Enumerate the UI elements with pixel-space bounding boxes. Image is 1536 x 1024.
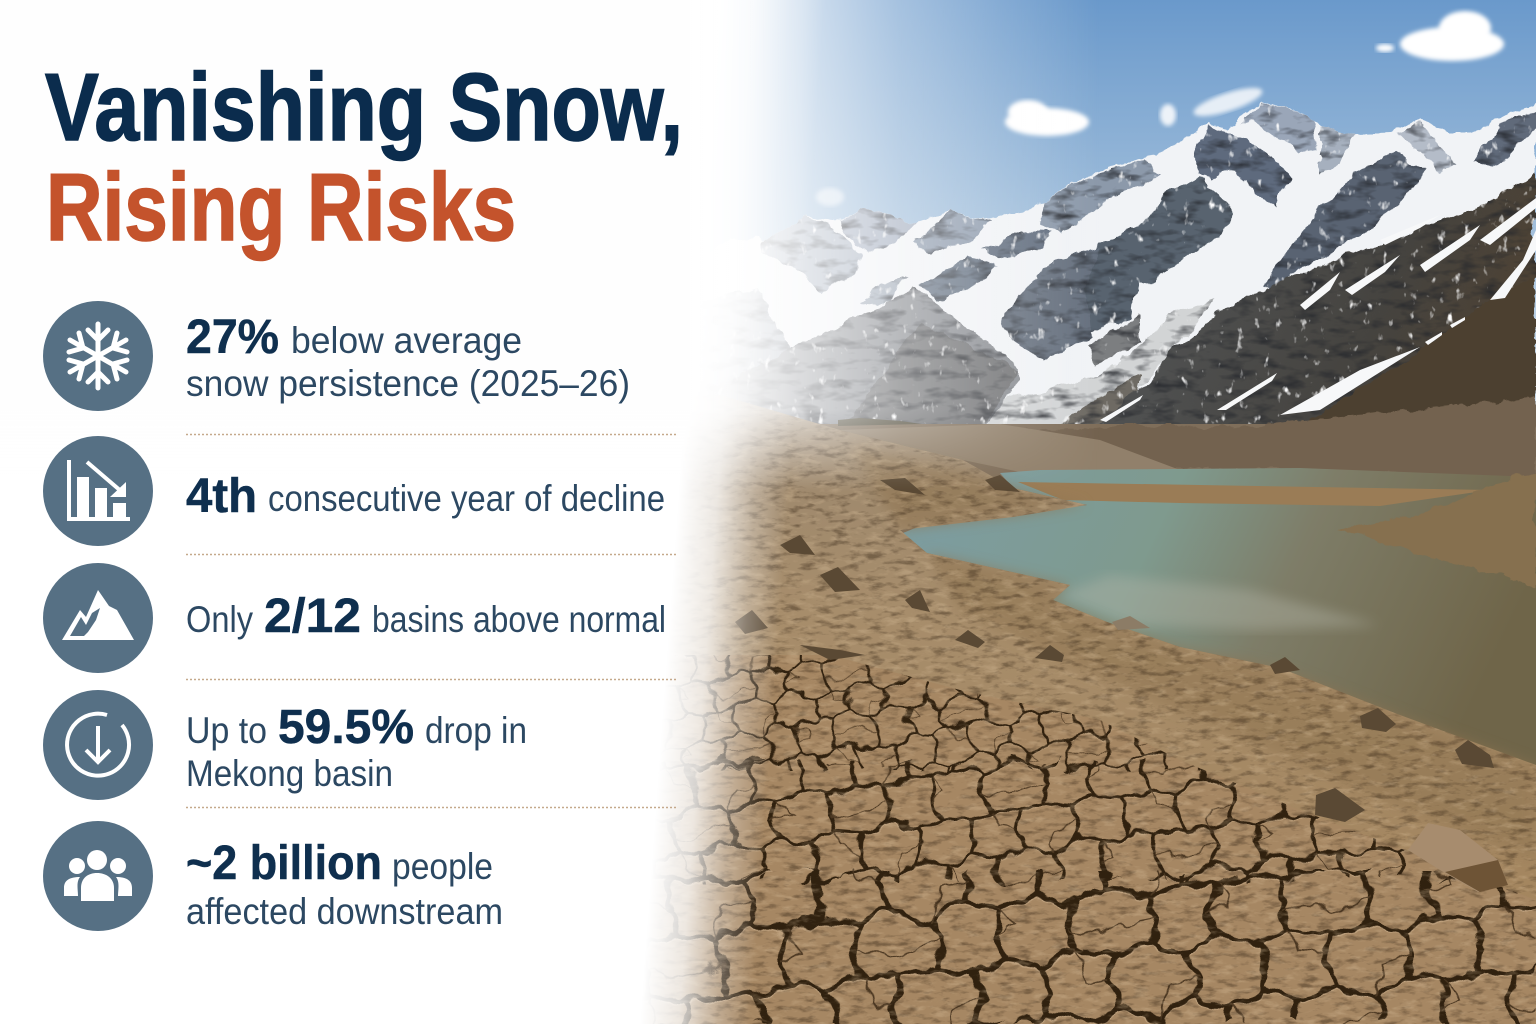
stat text: 4th (186, 470, 257, 523)
stat: consecutive decline (43, 436, 665, 546)
landscape photo: mountains, lake and cracked earth (560, 0, 1536, 1024)
white fade into text panel (560, 0, 1074, 1024)
title line 1: Vanishing Snow, (45, 54, 683, 161)
right bank (1338, 470, 1536, 585)
stat text: snow persistence (2025–26) (186, 363, 630, 404)
glacier tongue (953, 300, 1215, 427)
icon: down arrow in circle (43, 690, 153, 800)
stat text (186, 590, 666, 643)
scattered rocks (735, 475, 1494, 822)
stat text (186, 837, 503, 932)
sky (600, 0, 1536, 440)
grey rock faces (700, 103, 1536, 410)
stat text (186, 701, 527, 794)
title (45, 54, 683, 261)
stat text: below average (291, 320, 522, 361)
large boulder (1408, 823, 1508, 892)
snow base of mountain range (660, 102, 1536, 440)
stat text: basins above normal (372, 599, 666, 640)
stat: snow persistence (43, 301, 630, 411)
stat text (186, 470, 665, 523)
cracked earth (656, 655, 1536, 1024)
stat text: 59.5% (278, 701, 414, 754)
stat: people affected (43, 821, 503, 932)
snow streaks on dark slopes (1100, 198, 1536, 422)
lower grey mountain (690, 288, 1140, 432)
icon: people (43, 821, 153, 931)
stat text: consecutive year of decline (268, 478, 665, 519)
icon: declining bar chart (43, 436, 153, 546)
stat: Mekong drop (43, 690, 527, 800)
title line 2: Rising Risks (46, 154, 516, 261)
foreground soil (560, 395, 1536, 1024)
lake reflections (1060, 575, 1380, 630)
icon: snowflake (43, 301, 153, 411)
stat text (186, 311, 630, 404)
stat text: 2/12 (264, 590, 361, 643)
stat text: Only (186, 599, 253, 640)
clouds (816, 11, 1504, 206)
ground texture (674, 416, 1536, 1024)
stat text: 27% (186, 311, 279, 364)
dark right slopes (1090, 173, 1536, 440)
stat text: Mekong basin (186, 753, 393, 794)
lake (898, 468, 1536, 770)
stat text: ~2 billion (186, 837, 382, 890)
stat: basins above normal (43, 563, 666, 673)
shoreline mud (850, 445, 1536, 860)
sand bar in lake (1018, 482, 1490, 506)
stat text: Up to (186, 710, 267, 751)
stat text: affected downstream (186, 891, 503, 932)
stat text: drop in (425, 710, 527, 751)
far valley floor (560, 424, 1536, 1024)
icon: mountains (43, 563, 153, 673)
stat text: people (392, 846, 493, 887)
